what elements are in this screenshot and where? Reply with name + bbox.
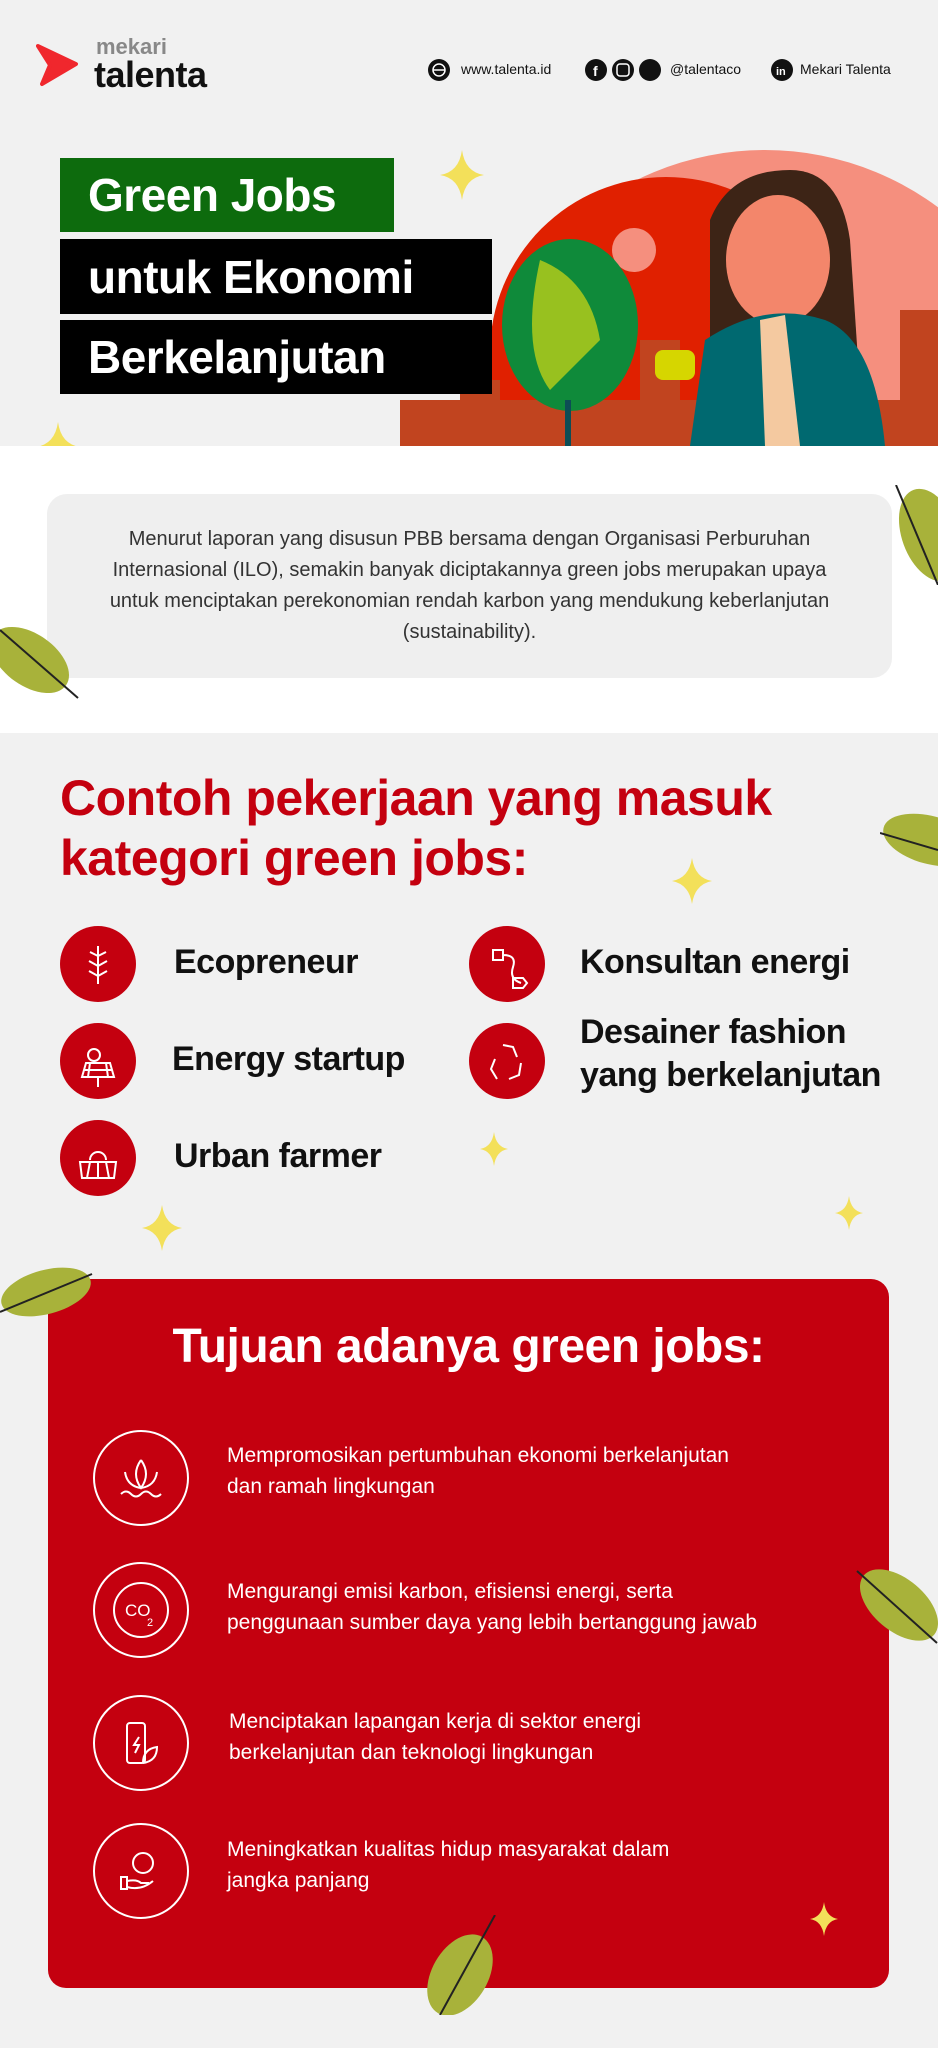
job: Desainer fashion: Desainer fashion (580, 1013, 846, 1051)
star panel (810, 1902, 838, 1936)
goal 1: dan ramah lingkungan (227, 1475, 435, 1498)
star right (835, 1196, 863, 1230)
title: untuk Ekonomi (88, 250, 414, 302)
title (60, 158, 492, 394)
red panel: goals (48, 1279, 889, 1988)
section heading: kategori green jobs: (60, 830, 528, 886)
social contacts: in (776, 66, 786, 78)
goal 2: 2 (147, 1617, 153, 1629)
leaf bottom of panel (427, 1915, 496, 2015)
social contacts: Mekari Talenta (800, 61, 891, 77)
leaf: left of intro (0, 627, 79, 699)
hero illustration (400, 150, 938, 446)
intro text box (47, 494, 892, 678)
goal 4: jangka panjang (227, 1869, 369, 1892)
job: Urban farmer: Urban farmer (174, 1137, 382, 1175)
leaf: right of intro (895, 485, 938, 585)
social contacts: f (593, 63, 598, 79)
title: Berkelanjutan (88, 331, 386, 383)
goal 1: Mempromosikan pertumbuhan ekonomi berkelanjutan (227, 1444, 729, 1467)
star hero (440, 150, 484, 200)
job: Konsultan energi (469, 926, 850, 1002)
job: Desainer fashion (469, 1013, 881, 1099)
goal 4: Meningkatkan kualitas hidup masyarakat dalam (227, 1838, 669, 1861)
social contacts (428, 59, 891, 81)
header logo: mekari (96, 34, 167, 59)
title: Green Jobs (88, 169, 336, 221)
section heading (60, 770, 772, 886)
job: Ecopreneur (60, 926, 358, 1002)
job: Ecopreneur: Ecopreneur (174, 943, 358, 981)
intro text box: Menurut laporan yang disusun PBB bersama dengan Organisasi Perburuhan Internasional (ILO), semakin banyak diciptakannya green jobs merupakan upaya untuk menciptakan perekonomian rendah karbon yang mendukung keberlanjutan (sustainability). (110, 528, 829, 643)
star (672, 858, 712, 904)
panel title: Tujuan adanya green jobs: (172, 1320, 765, 1373)
job: Energy startup: Energy startup (172, 1040, 405, 1078)
job list (60, 926, 881, 1196)
goal 4 (93, 1823, 669, 1919)
header logo: talenta (94, 54, 207, 95)
star left (142, 1205, 182, 1251)
leaf left of panel (0, 1268, 92, 1316)
leaf right of panel (856, 1569, 938, 1644)
leaf right (880, 814, 938, 866)
star small (480, 1132, 508, 1166)
social contacts: @talentaco (670, 61, 741, 77)
goal 3: berkelanjutan dan teknologi lingkungan (229, 1741, 593, 1764)
job: Desainer fashion: yang berkelanjutan (580, 1056, 881, 1094)
goal 2: Mengurangi emisi karbon, efisiensi energi, serta (227, 1580, 673, 1603)
goal 1 (93, 1430, 729, 1526)
header logo (36, 34, 208, 95)
job: Konsultan energi: Konsultan energi (580, 943, 850, 981)
goal items (93, 1430, 757, 1919)
goal 2 (93, 1562, 757, 1658)
goal 2: CO (125, 1601, 150, 1620)
goal 2: penggunaan sumber daya yang lebih bertanggung jawab (227, 1611, 757, 1634)
section heading: Contoh pekerjaan yang masuk (60, 770, 772, 826)
job: Urban farmer (60, 1120, 382, 1196)
star hero left (40, 422, 76, 446)
job: Energy startup (60, 1023, 405, 1099)
social contacts: www.talenta.id (461, 61, 551, 77)
goal 3: Menciptakan lapangan kerja di sektor energi (229, 1710, 641, 1733)
goal 3 (93, 1695, 641, 1791)
